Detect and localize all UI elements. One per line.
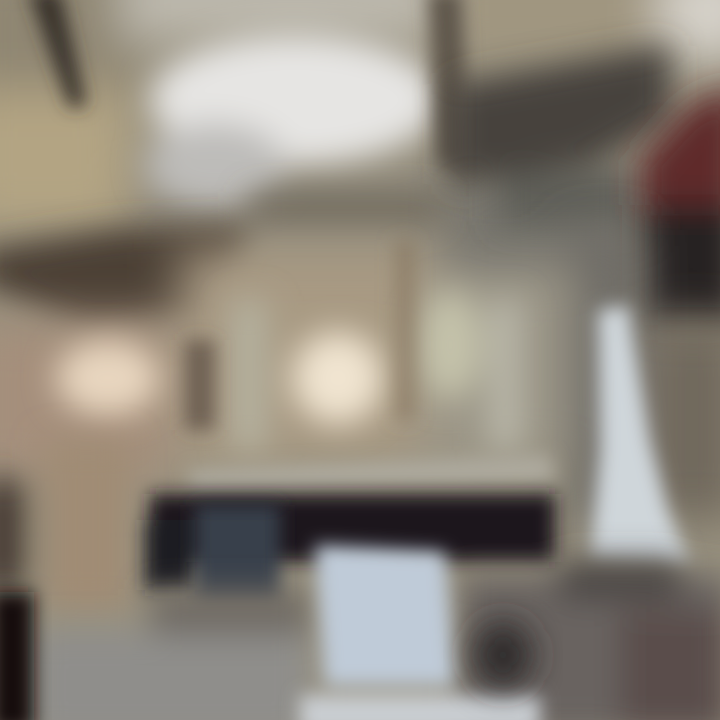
red and dark right-side object [640,85,720,325]
lower-left warm wall [0,230,720,530]
dark mid band [0,195,440,330]
black counter [145,494,555,590]
dark upper right band [450,45,670,225]
white ceiling glow [145,35,440,207]
pale counter edge [190,455,555,492]
left warm column [0,440,130,610]
pale blue box [300,545,540,720]
column between lights [185,240,415,430]
glowing windows and lights [56,290,520,450]
black bottom-left post [0,592,34,720]
dark blue cabinet [195,505,280,603]
pale right column [590,305,690,565]
lower floor [30,560,720,720]
dark round floor object [473,621,533,689]
upper wall and ceiling [0,0,720,300]
dark ceiling beams [28,0,470,170]
